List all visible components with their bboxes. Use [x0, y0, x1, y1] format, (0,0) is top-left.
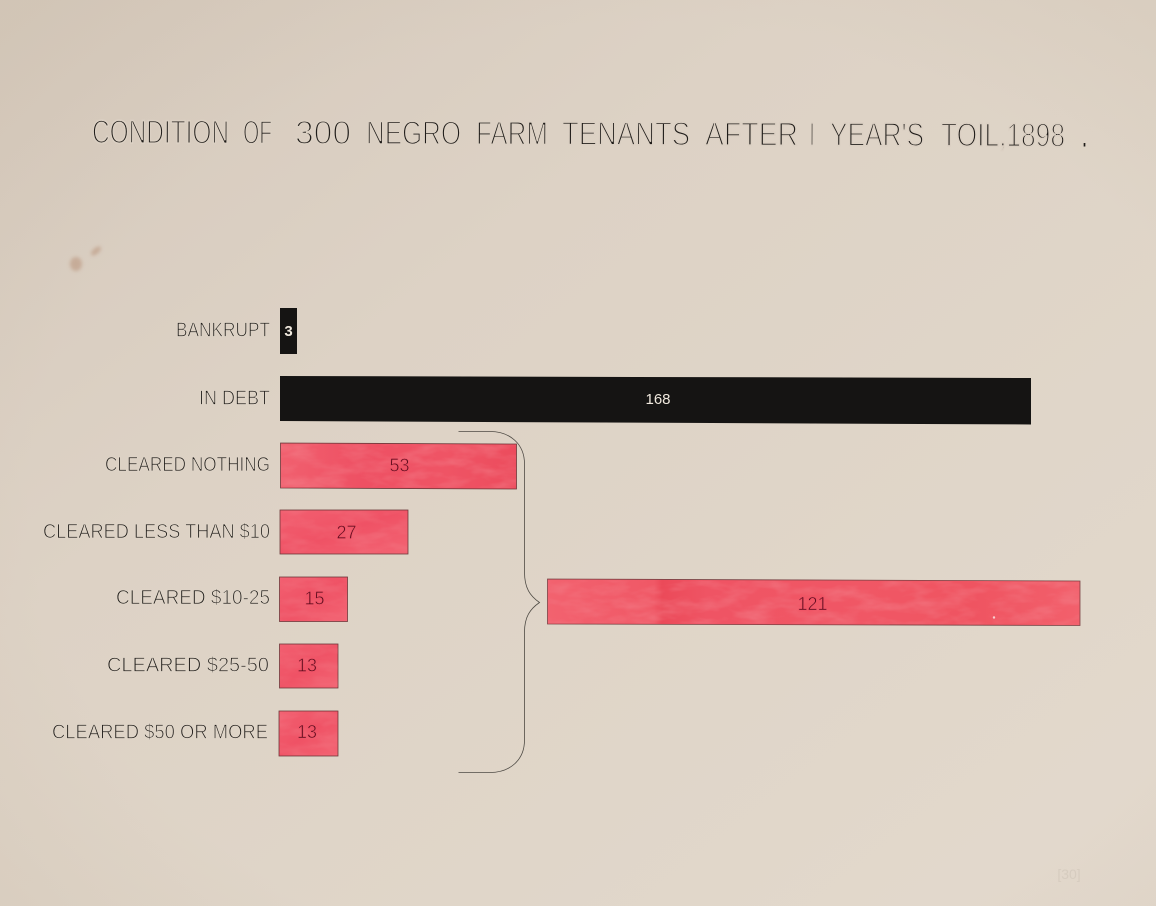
value: 15: 15 [304, 588, 325, 608]
brace grouping cleared rows [458, 432, 540, 772]
label: cleared nothing: CLEARED NOTHING [105, 454, 270, 476]
bar: total cleared [548, 579, 1080, 626]
value: 13: 13 [297, 656, 317, 676]
stain: foxing mark [70, 245, 103, 271]
label: in debt: IN DEBT [199, 388, 270, 410]
bar: in debt [280, 376, 1031, 424]
row: bankrupt [176, 308, 297, 354]
title: . [1082, 116, 1087, 153]
row: cleared $10-25 [116, 577, 348, 622]
row: in debt [199, 376, 1031, 424]
label: cleared $50 or more: CLEARED $50 OR MORE [52, 722, 268, 744]
bar: cleared $25-50 [280, 644, 338, 688]
bar: bankrupt [280, 308, 297, 354]
page number: [30] [1057, 866, 1081, 882]
value: 27: 27 [336, 522, 357, 542]
title: 300 [295, 114, 351, 151]
label: cleared $10-25: CLEARED $10-25 [116, 587, 270, 609]
label: cleared $25-50: CLEARED $25-50 [107, 654, 269, 676]
bar: cleared $50 or more [279, 711, 338, 756]
label: bankrupt: BANKRUPT [176, 320, 270, 342]
value: 53: 53 [389, 456, 410, 476]
bar: cleared nothing [280, 443, 516, 489]
value: 121: 121 [797, 594, 828, 614]
value: 3: 3 [284, 323, 293, 340]
row: cleared $25-50 [107, 644, 338, 688]
title: AFTER [705, 115, 798, 152]
row: cleared less than $10 [43, 510, 408, 554]
title: FARM [476, 114, 548, 152]
value: 13: 13 [297, 722, 317, 742]
title: TENANTS [562, 115, 690, 152]
title: YEAR'S [830, 116, 924, 153]
bar: cleared less than $10 [280, 510, 408, 554]
label: cleared less than $10: CLEARED LESS THAN $10 [43, 521, 270, 543]
row: cleared nothing [105, 443, 516, 489]
title: CONDITION [92, 113, 229, 150]
bar: cleared $10-25 [280, 577, 348, 622]
title: OF [243, 114, 272, 151]
title: NEGRO [366, 114, 461, 151]
title: TOIL,1898 [941, 116, 1065, 153]
row: cleared $50 or more [52, 711, 338, 756]
total: cleared 121 [548, 579, 1080, 626]
value: 168: 168 [645, 391, 671, 408]
title [92, 113, 1087, 153]
title: I [810, 116, 814, 153]
